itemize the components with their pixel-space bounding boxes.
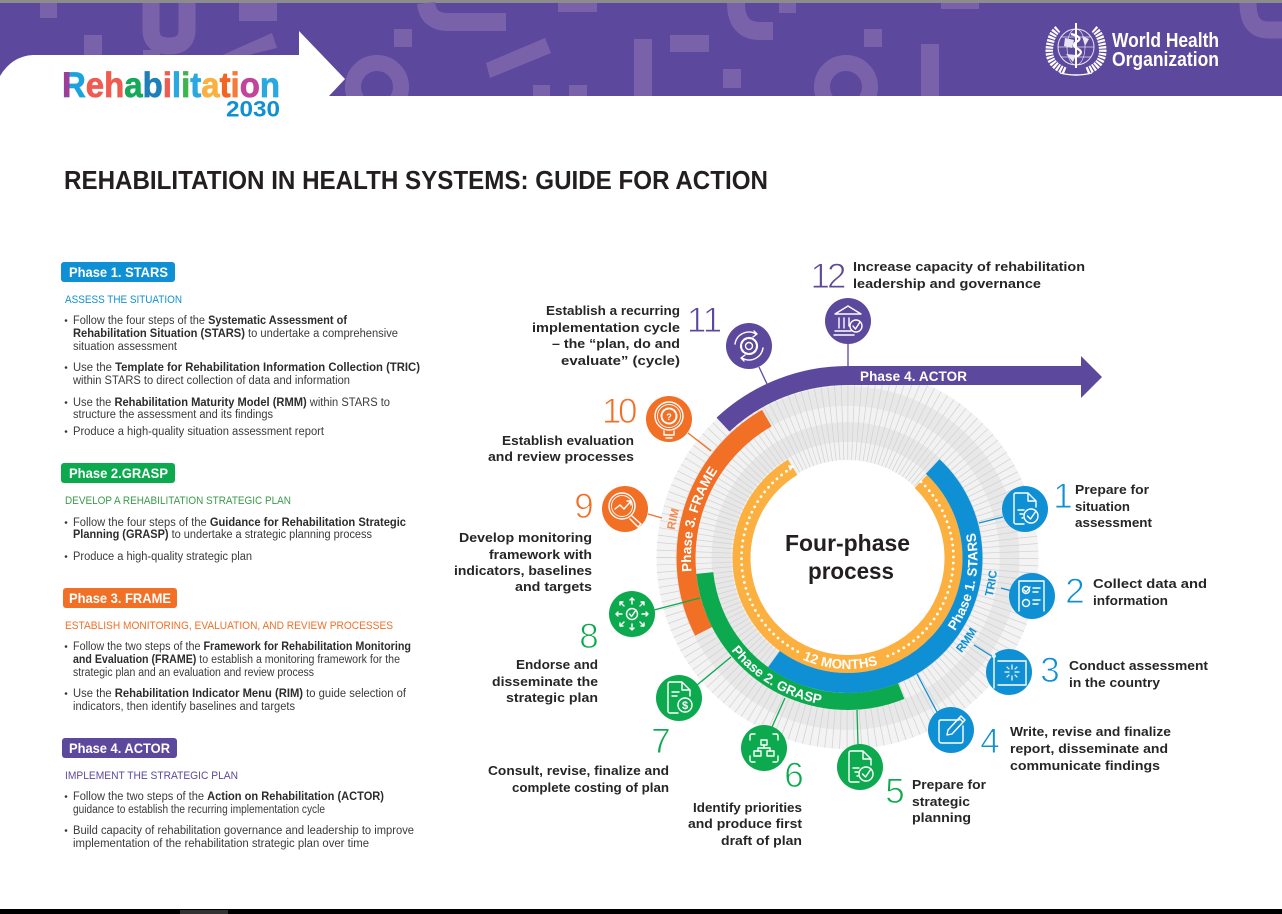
logo: Rehabilitation 2030: Rehabilitation [62,66,280,105]
bullet list: phase 3: indicators, then identify baselines and targets [73,701,295,713]
bullet list: phase 2: Produce a high-quality strategic plan [73,551,252,563]
ring: 12 months [732,460,962,673]
step 12: 12 [811,257,845,296]
label: step 12: Increase capacity of rehabilitation [853,259,1085,274]
bullet list: phase 1: within STARS to direct collection of data and information [72,375,350,387]
bullet list: phase 3 [65,641,411,713]
label: step 1 [1075,482,1153,530]
panel: Phase 1 STARS [61,262,420,438]
step 6 [688,698,804,848]
label: step 3: Conduct assessment [1069,658,1209,673]
label: step 4: Write, revise and finalize [1010,724,1171,739]
label: step 2: information [1093,593,1168,608]
step 10: 10 [602,392,637,431]
bullet list: phase 2 [65,517,407,563]
badge: Phase 2: Phase 2.GRASP [69,465,168,481]
centre label [785,530,910,584]
subheading: implement: IMPLEMENT THE STRATEGIC PLAN [65,770,238,782]
step 6: 6 [784,756,804,795]
bullet list: phase 4 [65,791,414,850]
step 4: 4 [980,722,1000,761]
label: step 11: Establish a recurring [546,303,680,318]
ring: phase 2 GRASP: Phase 2. GRASP [732,645,822,703]
step 5 [837,710,986,825]
label: step 6: Identify priorities [693,800,802,815]
organization name: World Health [1112,30,1219,52]
tool label: TRIC: TRIC [984,570,997,596]
step 9 [454,486,662,594]
label: step 3: in the country [1069,675,1161,690]
bullet list: phase 1: Use the Rehabilitation Maturity Model (RMM) within STARS to [73,397,390,409]
label: step 2 [1093,576,1207,608]
icon: radiating arrows [616,598,648,630]
label: step 9: Develop monitoring [459,530,592,545]
title: REHABILITATION IN HEALTH SYSTEMS: GUIDE FOR ACTION [64,167,768,195]
badge: Phase 1: Phase 1. STARS [69,264,168,280]
bullet list: phase 4: guidance to establish the recurring implementation cycle [73,804,325,816]
step 7 [488,657,731,795]
label: step 9: indicators, baselines [454,563,592,578]
step 7: $ [682,700,688,712]
label: step 10 [488,433,634,464]
step 10: ? [666,412,672,422]
label: step 4: report, disseminate and [1010,741,1168,756]
step 7: 7 [651,722,671,761]
step 5: 5 [885,772,905,811]
label: step 1: Prepare for [1075,482,1149,497]
label: step 8: strategic plan [506,690,598,705]
label: step 5: strategic [912,794,970,809]
label: step 3 [1069,658,1209,690]
step 12 [811,257,1085,366]
bullet list: phase 3: Use the Rehabilitation Indicator Menu (RIM) to guide selection of [73,688,407,700]
bullet list: phase 1: Produce a high-quality situation assessment report [73,426,325,438]
bullet list: phase 2: Planning (GRASP) to undertake a strategic planning process [73,529,372,541]
bullet list: phase 1: situation assessment [73,341,178,353]
label: step 7: complete costing of plan [512,780,669,795]
ring: 12 months: 12 MONTHS [803,652,877,670]
organization name [1112,30,1219,71]
panel: Phase 4 ACTOR [62,738,414,850]
ring: phase 3 FRAME [676,410,772,636]
bottom screen edge [0,909,1282,914]
bullet list: phase 2: Follow the four steps of the Guidance for Rehabilitation Strategic [73,517,407,529]
icon: institution building [834,306,862,335]
badge: Phase 3: Phase 3. FRAME [69,590,171,606]
tool label: RIM: RIM [667,508,679,530]
label: step 8: disseminate the [492,674,598,689]
bullet list: phase 4: implementation of the rehabilitation strategic plan over time [73,838,369,850]
ring: phase 1 STARS [768,459,982,693]
step 11 [532,301,772,384]
label: step 6: draft of plan [721,833,802,848]
label: step 11: implementation cycle [532,320,680,335]
arrow: phase 4 ACTOR: Phase 4. ACTOR [860,369,967,384]
bullet list: phase 4: Follow the two steps of the Action on Rehabilitation (ACTOR) [73,791,384,803]
icon: lightbulb with gear [655,402,683,438]
step 2: 2 [1065,572,1085,611]
tool label: RMM: RMM [956,627,977,653]
label: step 9 [454,530,592,594]
bullet list: phase 3: strategic plan and an evaluation and review process [73,667,314,679]
label: step 11: – the “plan, do and [552,336,680,351]
label: step 6: and produce first [688,816,803,831]
label: step 9: framework with [489,547,592,562]
step 3 [974,645,1209,695]
label: step 8 [492,657,598,705]
label: step 11: evaluate” (cycle) [561,353,680,368]
organization name: Organization [1112,49,1219,71]
label: step 4 [1010,724,1171,773]
icon: WHO emblem [1049,23,1103,75]
label: step 10: and review processes [488,449,634,464]
icon: document with dollar [668,682,692,713]
logo: Rehabilitation 2030: 2030 [226,96,280,122]
label: step 12 [853,259,1085,291]
label: step 11 [532,303,680,368]
chart: four-phase circular diagram [656,356,1102,749]
panel: Phase 3 FRAME [63,588,411,713]
arrow: phase 4 ACTOR [590,300,1105,816]
step 11: 11 [687,301,721,340]
bullet list: phase 1: Rehabilitation Situation (STARS) to undertake a comprehensive [73,328,398,340]
ring: phase 1 STARS: Phase 1. STARS [948,534,978,630]
bullet list: phase 1 [65,315,420,438]
bullet list: phase 1: structure the assessment and its findings [73,409,273,421]
label: step 1: situation [1075,499,1130,514]
centre label: Four-phase [785,530,910,556]
WHO logo [1049,23,1219,75]
icon: document with check [849,751,873,782]
label: step 2: Collect data and [1093,576,1207,591]
bullet list: phase 1: Use the Template for Rehabilitation Information Collection (TRIC) [73,362,420,374]
step 8: 8 [579,617,599,656]
bullet list: phase 4: Build capacity of rehabilitation governance and leadership to improve [73,825,414,837]
centre label: process [808,558,894,584]
ring: phase 2 GRASP [696,572,904,710]
icon: document with check [1014,493,1038,524]
step 1: 1 [1053,477,1073,516]
badge: Phase 4: Phase 4. ACTOR [69,740,170,756]
step 3: 3 [1040,651,1060,690]
label: step 8: Endorse and [516,657,598,672]
subheading: monitoring: ESTABLISH MONITORING, EVALUATION, AND REVIEW PROCESSES [65,620,393,632]
step 9: 9 [574,487,594,526]
grey tick dial [666,376,1029,740]
step 4 [917,674,1171,773]
panel: Phase 2 GRASP [61,463,407,563]
label: step 7 [488,763,669,795]
icon: checklist [1019,581,1044,611]
label: step 10: Establish evaluation [502,433,634,448]
bullet list: phase 3: and Evaluation (FRAME) to establish a monitoring framework for the [73,654,400,666]
label: step 9: and targets [515,579,592,594]
label: step 4: communicate findings [1010,758,1160,773]
bullet list: phase 3: Follow the two steps of the Framework for Rehabilitation Monitoring [73,641,411,653]
label: step 5: planning [912,810,971,825]
icon: flag with burst [993,655,1026,688]
label: step 5: Prepare for [912,777,986,792]
step 2 [1001,572,1207,619]
step 10 [488,392,711,464]
bullet list: phase 1: Follow the four steps of the Systematic Assessment of [73,315,347,327]
subheading: develop: DEVELOP A REHABILITATION STRATEGIC PLAN [65,495,291,507]
icon: pencil in square [939,716,965,743]
label: step 6 [688,800,803,848]
label: step 7: Consult, revise, finalize and [488,763,669,778]
step 8 [492,591,700,705]
ring: phase 3 FRAME: Phase 3. FRAME [681,466,718,572]
icon: org chart in brackets [750,734,778,762]
step 1 [979,477,1153,532]
label: step 5 [912,777,986,825]
label: step 1: assessment [1075,515,1153,530]
logo: Rehabilitation 2030 [62,66,280,122]
subheading: assess: ASSESS THE SITUATION [65,294,182,306]
icon: gear cycle [735,331,763,361]
label: step 12: leadership and governance [853,276,1041,291]
icon: magnifier with trend [609,493,641,527]
